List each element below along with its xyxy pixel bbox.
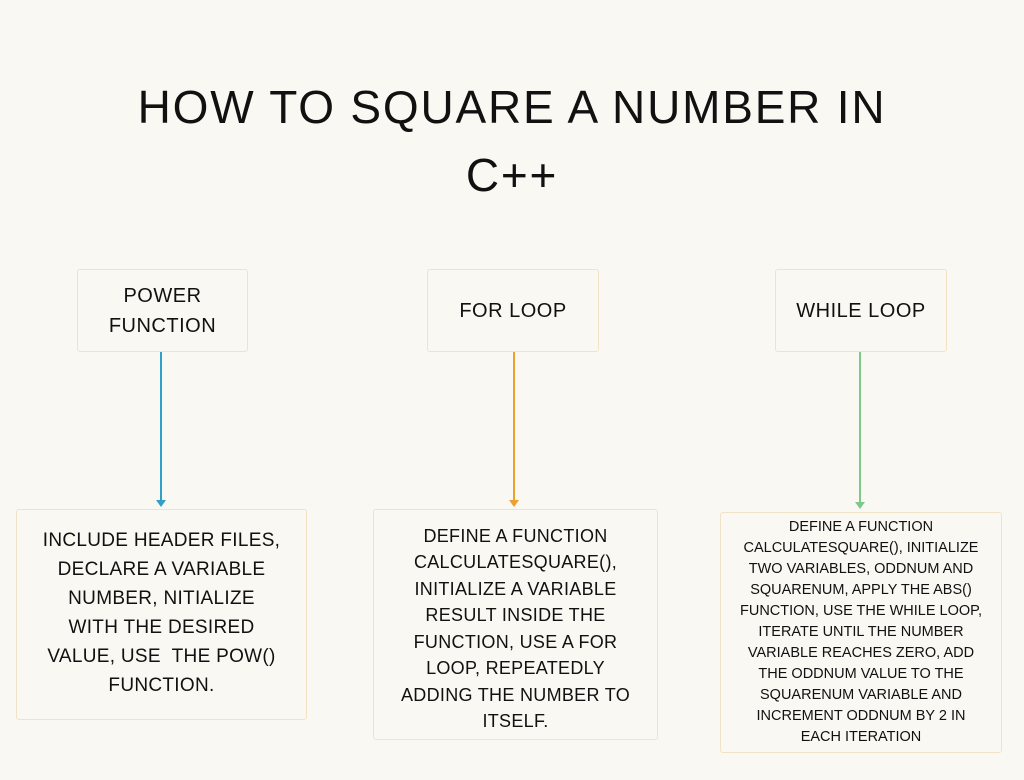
body: for loop: INITIALIZE A VARIABLE [414,578,617,598]
body: for loop [373,509,658,740]
header: for loop [427,269,599,352]
body: for loop: ITSELF. [482,711,549,731]
body: while loop: VARIABLE REACHES ZERO, ADD [748,645,974,661]
body: power function: INCLUDE HEADER FILES, [43,530,280,550]
header: while loop: WHILE LOOP [796,300,926,322]
body: while loop: SQUARENUM, APPLY THE ABS() [750,582,972,598]
body: for loop: FUNCTION, USE A FOR [414,632,617,652]
body: power function: FUNCTION. [108,674,215,696]
header: for loop: FOR LOOP [459,300,567,322]
body: for loop: DEFINE A FUNCTION [423,526,608,546]
title: C++ [466,149,558,201]
body: for loop: ADDING THE NUMBER TO [401,684,630,704]
body: while loop: CALCULATESQUARE(), INITIALIZE [743,540,978,556]
header: while loop [775,269,947,352]
body: power function: DECLARE A VARIABLE [58,558,265,580]
body: power function: VALUE, USE THE POW() [47,646,276,666]
body: while loop: TWO VARIABLES, ODDNUM AND [749,561,973,577]
body: while loop: DEFINE A FUNCTION [789,519,933,535]
header: power function: POWER [123,284,202,306]
title [138,81,886,201]
body: while loop: THE ODDNUM VALUE TO THE [758,666,964,682]
body: while loop: SQUARENUM VARIABLE AND [760,687,962,703]
body: for loop: RESULT INSIDE THE [425,605,606,625]
body: for loop: CALCULATESQUARE(), [414,552,617,572]
body: while loop [720,512,1002,753]
header: power function: FUNCTION [109,314,216,336]
body: while loop: FUNCTION, USE THE WHILE LOOP, [740,603,982,619]
body: power function [16,509,307,720]
arrow: blue [156,352,166,507]
body: while loop: ITERATE UNTIL THE NUMBER [758,624,964,640]
body: for loop: LOOP, REPEATEDLY [426,658,605,678]
body: while loop: INCREMENT ODDNUM BY 2 IN [757,708,965,724]
title: HOW TO SQUARE A NUMBER IN [138,81,886,133]
body: power function: NUMBER, NITIALIZE [68,588,255,608]
body: while loop: EACH ITERATION [801,729,921,745]
body: power function: WITH THE DESIRED [68,616,254,638]
arrow: green [855,352,865,509]
header: power function [77,269,248,352]
arrow: orange [509,352,519,507]
